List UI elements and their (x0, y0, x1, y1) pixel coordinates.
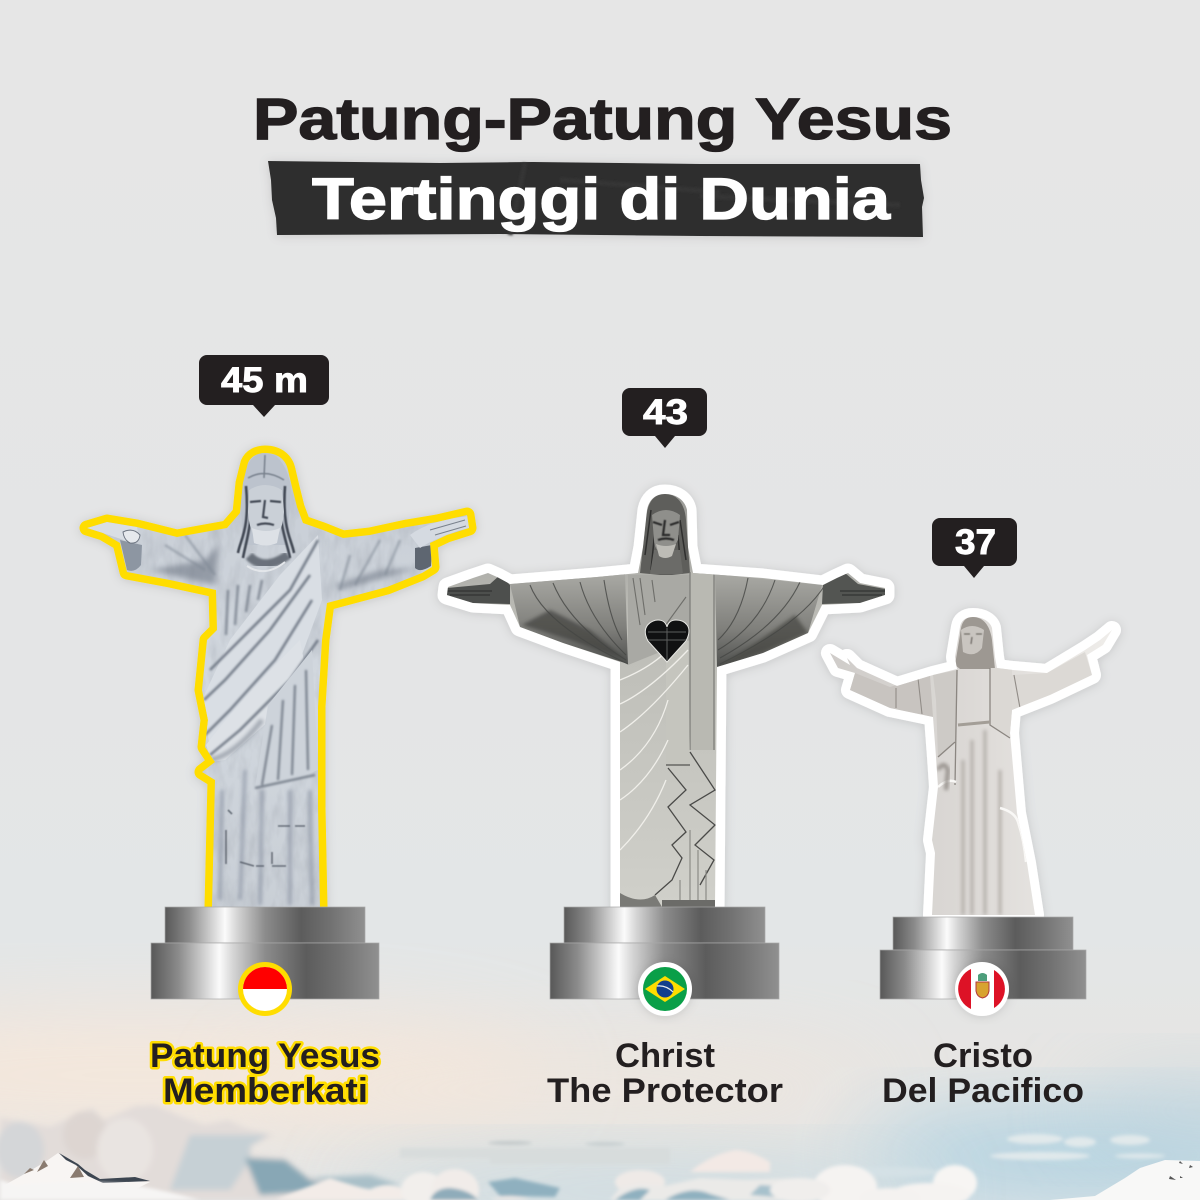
title (253, 87, 952, 237)
peach glow (0, 1015, 550, 1135)
height callout: 45 m: 45 m (221, 361, 308, 400)
label: Cristo Del Pacifico: Del Pacifico (882, 1072, 1084, 1110)
height callout: 43 (622, 388, 707, 448)
height callout: 37 (932, 518, 1017, 578)
label: Cristo Del Pacifico: Cristo (933, 1037, 1033, 1075)
height callout: 45 m (199, 355, 329, 417)
neck and collar (249, 555, 288, 564)
stone texture (106, 492, 464, 906)
statue body (87, 453, 469, 907)
hood and hair (240, 453, 291, 545)
belt (958, 722, 990, 725)
sash (202, 535, 322, 760)
sleeve shading (150, 545, 418, 590)
label: Christ The Protector: Christ (615, 1037, 715, 1075)
hair (955, 617, 995, 669)
height callout: 43: 43 (643, 393, 688, 432)
icon: Brazil flag (638, 962, 692, 1016)
statue body (830, 617, 1112, 915)
yellow sticker outline (87, 453, 469, 907)
robe folds (963, 730, 1000, 915)
icon: Peru flag (955, 962, 1009, 1016)
neck (650, 550, 683, 574)
cloud floor (0, 1150, 977, 1200)
sleeves shade (850, 673, 933, 717)
cloud tower left (0, 1105, 400, 1200)
robe folds (220, 770, 312, 905)
hands and forearms (447, 575, 510, 604)
drape lines (530, 578, 825, 664)
pedestal 1 (151, 907, 379, 999)
chest folds (226, 580, 262, 635)
mountain left (3, 1153, 150, 1192)
white sticker outline (830, 617, 1112, 915)
left hand (88, 522, 138, 541)
label: Christ The Protector (547, 1037, 783, 1110)
label: Patung Yesus Memberkati (150, 1037, 380, 1110)
hair (640, 494, 690, 575)
label: Christ The Protector: The Protector (547, 1072, 783, 1110)
white sticker outline (447, 494, 885, 907)
label: Patung Yesus Memberkati: Patung Yesus (150, 1037, 380, 1075)
title line 2: Tertinggi di Dunia (312, 167, 891, 232)
pedestal 2 (550, 907, 779, 999)
statue 3: Cristo Del Pacifico (830, 617, 1112, 915)
face (961, 626, 984, 654)
face (248, 485, 284, 532)
sleeve openings (120, 540, 142, 571)
right arm drape (715, 574, 822, 667)
stole (690, 572, 715, 750)
mantle (933, 670, 958, 757)
statue 2: Christ The Protector (447, 494, 885, 907)
left arm drape (510, 574, 628, 664)
blue sky glow (860, 1115, 1200, 1195)
zigzag hem (655, 752, 715, 895)
robe folds (620, 650, 688, 850)
height callout: 37: 37 (955, 523, 996, 562)
stratus bands (400, 1134, 1165, 1177)
statue body (447, 494, 885, 907)
label: Cristo Del Pacifico (882, 1037, 1084, 1110)
mountain right (1050, 1160, 1200, 1200)
heart window (645, 620, 689, 662)
chest (628, 575, 692, 665)
icon: Indonesia flag (238, 962, 292, 1016)
pedestal 3 (880, 917, 1086, 999)
right hand (410, 516, 469, 548)
face (652, 510, 680, 550)
hanging cloth (255, 650, 318, 788)
title line 1: Patung-Patung Yesus (253, 87, 952, 152)
torn tape banner (268, 161, 924, 237)
statue 1: Patung Yesus Memberkati (80, 450, 480, 910)
label: Patung Yesus Memberkati: Memberkati (163, 1072, 368, 1110)
